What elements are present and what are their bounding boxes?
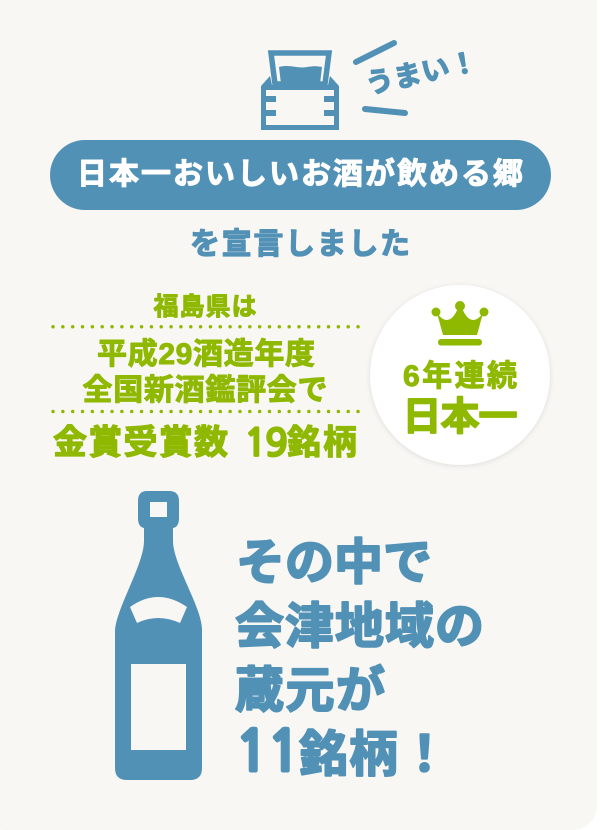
icon: emphasis line top: [356, 43, 394, 62]
text: gold award count: 19: [244, 424, 288, 462]
badge: six years number one: [370, 285, 550, 466]
text: contest name line 2: 全国新酒鑑評会で: [82, 374, 328, 407]
text: prefecture: 福島県は: [154, 293, 256, 321]
text: line 1: その中で: [236, 536, 432, 590]
icon: sake bottle: [115, 491, 202, 780]
icon: masu sake box: [261, 53, 339, 130]
text: line 4: 銘柄！: [299, 728, 449, 782]
text: gold award count: [53, 424, 357, 462]
icon: crown: [432, 301, 488, 346]
text: line 2: 会津地域の: [235, 600, 484, 654]
text: contest name: 平成29酒造年度: [97, 338, 315, 371]
text: number one: 日本一: [402, 396, 518, 439]
subheading: を宣言しました: [190, 228, 410, 261]
text: gold award count: 銘柄: [287, 424, 357, 462]
text: line 4: 11: [235, 725, 301, 780]
heading pill: 日本一おいしいお酒が飲める郷: [77, 157, 523, 191]
text: umai: うまい！: [363, 46, 481, 100]
icon: emphasis line bottom: [365, 109, 405, 113]
text: gold award count: 金賞受賞数: [53, 424, 228, 462]
text block: main message: [235, 536, 484, 782]
text block: award details: [53, 293, 359, 462]
text: line 3: 蔵元が: [235, 664, 385, 718]
heading pill: [50, 140, 551, 210]
text: line 4: [235, 725, 449, 782]
text: six consecutive years: 6年連続: [403, 360, 517, 393]
